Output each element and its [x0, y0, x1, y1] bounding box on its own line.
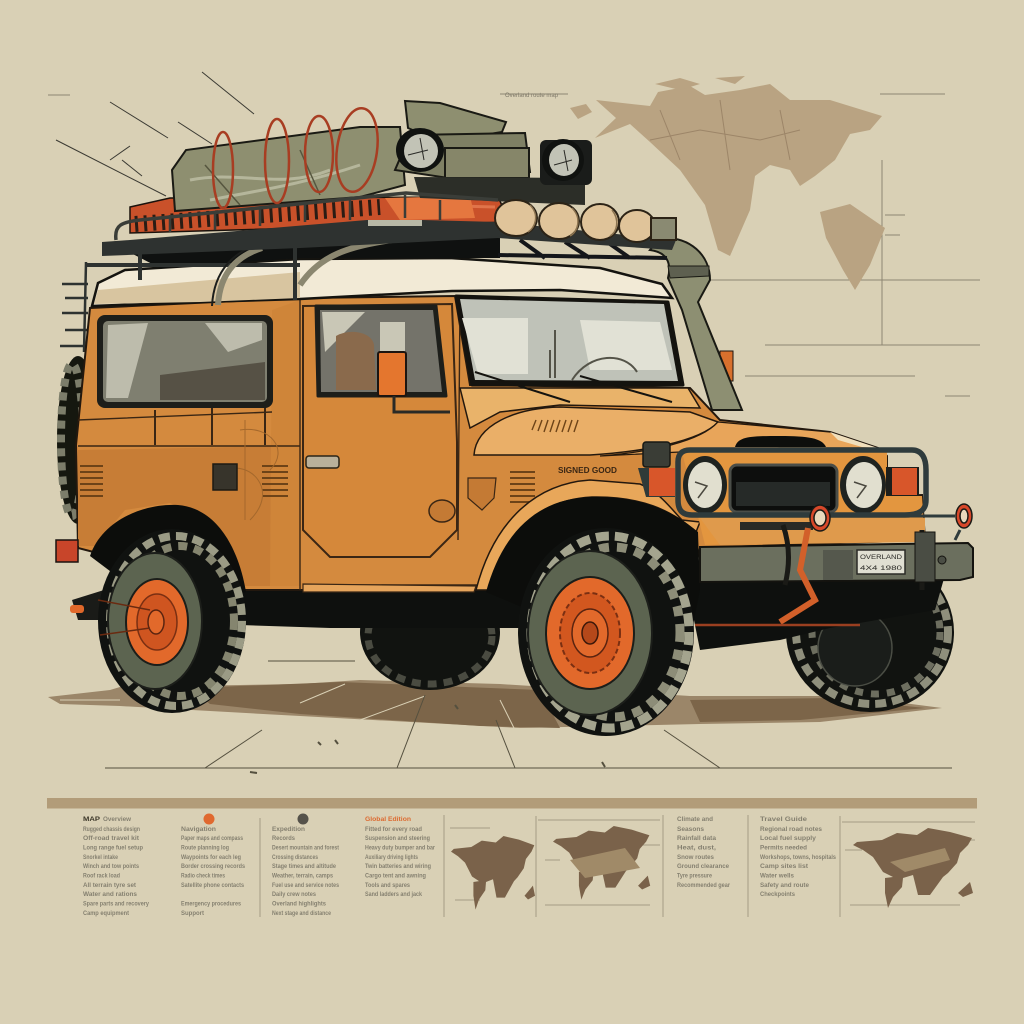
text column 5: Climate and: [677, 816, 713, 823]
rear panel sketch: [225, 420, 278, 520]
text column 6: Workshops, towns, hospitals: [760, 854, 836, 861]
rear wheel arch: [90, 505, 246, 620]
far side mirror: [720, 351, 733, 381]
icon: orange badge: [204, 814, 214, 824]
text column 2: Navigation: [181, 826, 216, 833]
text column 3: [272, 814, 340, 917]
ground perspective lines: [105, 661, 952, 773]
speed lines: [56, 72, 254, 196]
text column 2: Support: [181, 910, 205, 917]
rack frame: [102, 193, 676, 256]
text column 4: Auxiliary driving lights: [365, 854, 418, 861]
far front tire: [786, 552, 954, 712]
turn signal left: [638, 442, 675, 497]
text column 1: Winch and tow points: [83, 863, 139, 870]
rear hitch: [72, 590, 104, 620]
text column 1: MAP: [83, 816, 101, 823]
far rear tire: [360, 574, 500, 690]
rear ladder: [60, 262, 88, 352]
roof rack supports: [86, 240, 392, 306]
headlight right: [840, 456, 886, 514]
text column 4: Tools and spares: [365, 882, 410, 889]
rear panel pillar: [270, 300, 300, 586]
text column 4: Cargo tent and awning: [365, 872, 426, 880]
hood scoop: [735, 436, 826, 447]
lower rear shade: [78, 446, 300, 586]
hood top front: [600, 422, 878, 456]
text column 4: Twin batteries and wiring: [365, 863, 431, 870]
text column 1: Spare parts and recovery: [83, 900, 149, 908]
text column 5: Rainfall data: [677, 835, 716, 842]
ground shadow: [48, 680, 942, 730]
text column 1: Roof rack load: [83, 872, 120, 880]
beige drums: [495, 200, 676, 242]
turn signal right: [886, 467, 919, 496]
text column 6: Water wells: [760, 872, 794, 880]
text column 6: Safety and route: [760, 882, 809, 889]
text column 2: Border crossing records: [181, 863, 245, 870]
text column 1: Camp equipment: [83, 910, 130, 917]
chassis: [225, 560, 945, 650]
text column 6: Camp sites list: [760, 863, 809, 870]
olive tent bag: [172, 127, 405, 211]
front wheel arch: [486, 497, 700, 640]
text column 3: Expedition: [272, 826, 305, 833]
text column 5: Tyre pressure: [677, 872, 712, 880]
bumper: [700, 525, 973, 590]
text column 6: Local fuel supply: [760, 835, 816, 842]
icon: dark badge: [298, 814, 308, 824]
text column 2: [181, 814, 245, 917]
text column 5: Snow routes: [677, 854, 714, 861]
aux light arms: [905, 516, 960, 540]
text column 5: [677, 816, 730, 889]
body seam lines: [78, 300, 478, 590]
text column 2: Radio check times: [181, 872, 225, 880]
headlight left: [683, 456, 727, 514]
text column 2: Waypoints for each leg: [181, 854, 241, 861]
small map 3: [842, 822, 975, 908]
text column 3: Records: [272, 835, 295, 842]
text column 4: [365, 816, 435, 898]
text column 5: Recommended gear: [677, 882, 730, 889]
column dividers: [260, 815, 840, 917]
text column 4: Suspension and steering: [365, 835, 430, 842]
rear window: [97, 315, 273, 408]
side mirror: [378, 352, 450, 412]
snorkel: [650, 238, 742, 410]
small map 1: [450, 828, 535, 910]
door window: [316, 306, 446, 396]
roof: [92, 258, 672, 306]
world map with grid lines: Overland route map: [505, 93, 559, 99]
roof lamp left: [396, 128, 444, 172]
text column 6: Regional road notes: [760, 826, 822, 833]
rear tire: [98, 529, 246, 713]
aux lights: [810, 504, 972, 531]
tow strap: [780, 528, 815, 622]
text column 5: Seasons: [677, 826, 704, 833]
bull bar: [678, 450, 926, 515]
upper gear bags: [395, 101, 530, 182]
text column 5: Heat, dust,: [677, 844, 716, 852]
text column 4: Global Edition: [365, 816, 411, 823]
text column 3: Daily crew notes: [272, 891, 316, 898]
front tire: [518, 528, 694, 736]
light hood edge: [830, 432, 878, 448]
fuel cap: [429, 500, 455, 522]
text column 1: [83, 816, 149, 917]
control box: [213, 464, 237, 490]
hood vent: [532, 420, 578, 432]
small map 2: [538, 820, 660, 905]
rear fog light: [70, 605, 84, 613]
text column 3: Next stage and distance: [272, 910, 331, 917]
text column 1: All terrain tyre set: [83, 882, 137, 889]
spare wheel: [57, 356, 99, 524]
hood: [474, 407, 718, 455]
vents: [80, 466, 535, 502]
world map with grid lines: [48, 76, 980, 396]
text column 1: Off-road travel kit: [83, 835, 140, 842]
vehicle body: [76, 296, 925, 592]
text column 3: Stage times and altitude: [272, 863, 336, 870]
text column 4: Sand ladders and jack: [365, 891, 422, 898]
tail light: [56, 540, 78, 562]
body panels: [76, 296, 925, 590]
text column 1: Overview: [103, 816, 132, 823]
text column 3: Overland highlights: [272, 900, 326, 908]
text column 6: Checkpoints: [760, 891, 795, 898]
orange cargo: [130, 196, 510, 233]
text column 2: Satellite phone contacts: [181, 882, 244, 889]
text column 1: Snorkel intake: [83, 854, 118, 861]
text column 2: Route planning log: [181, 844, 229, 852]
license plate: [857, 550, 905, 574]
text column 2: Paper maps and compass: [181, 835, 243, 842]
text column 3: Weather, terrain, camps: [272, 872, 333, 880]
text column 1: Water and rations: [83, 891, 137, 898]
text column 1: Long range fuel setup: [83, 844, 143, 852]
text column 4: Fitted for every road: [365, 826, 422, 833]
text column 4: Heavy duty bumper and bar: [365, 844, 435, 852]
door handle: [306, 456, 339, 468]
license plate: 4X4 1980: [860, 566, 903, 572]
roof straps: [155, 385, 265, 445]
roof lamp right: [540, 139, 592, 185]
text column 2: Emergency procedures: [181, 900, 241, 908]
front fascia: [682, 452, 925, 545]
tie rod: [695, 624, 860, 626]
rack underside: [125, 236, 500, 268]
fender band: [476, 480, 700, 590]
windshield: [456, 296, 683, 402]
grille: [730, 465, 837, 512]
text column 1: Rugged chassis design: [83, 826, 140, 833]
sill: [303, 584, 476, 592]
text column 5: Ground clearance: [677, 863, 729, 870]
text column 3: Desert mountain and forest: [272, 844, 340, 852]
text column 3: Fuel use and service notes: [272, 882, 339, 889]
badge text: SIGNED GOOD: [558, 466, 617, 475]
emblem panel: [468, 478, 496, 510]
cowl: [460, 388, 700, 428]
text column 3: Crossing distances: [272, 854, 318, 861]
license plate: OVERLAND: [860, 555, 903, 561]
text column 6: [760, 816, 836, 898]
text column 6: Travel Guide: [760, 816, 807, 823]
red ring straps: [213, 106, 383, 208]
door: [303, 304, 457, 557]
rack slats: [498, 240, 667, 258]
info bar: [47, 798, 977, 808]
dark gear block: [414, 177, 585, 205]
text column 6: Permits needed: [760, 844, 807, 852]
